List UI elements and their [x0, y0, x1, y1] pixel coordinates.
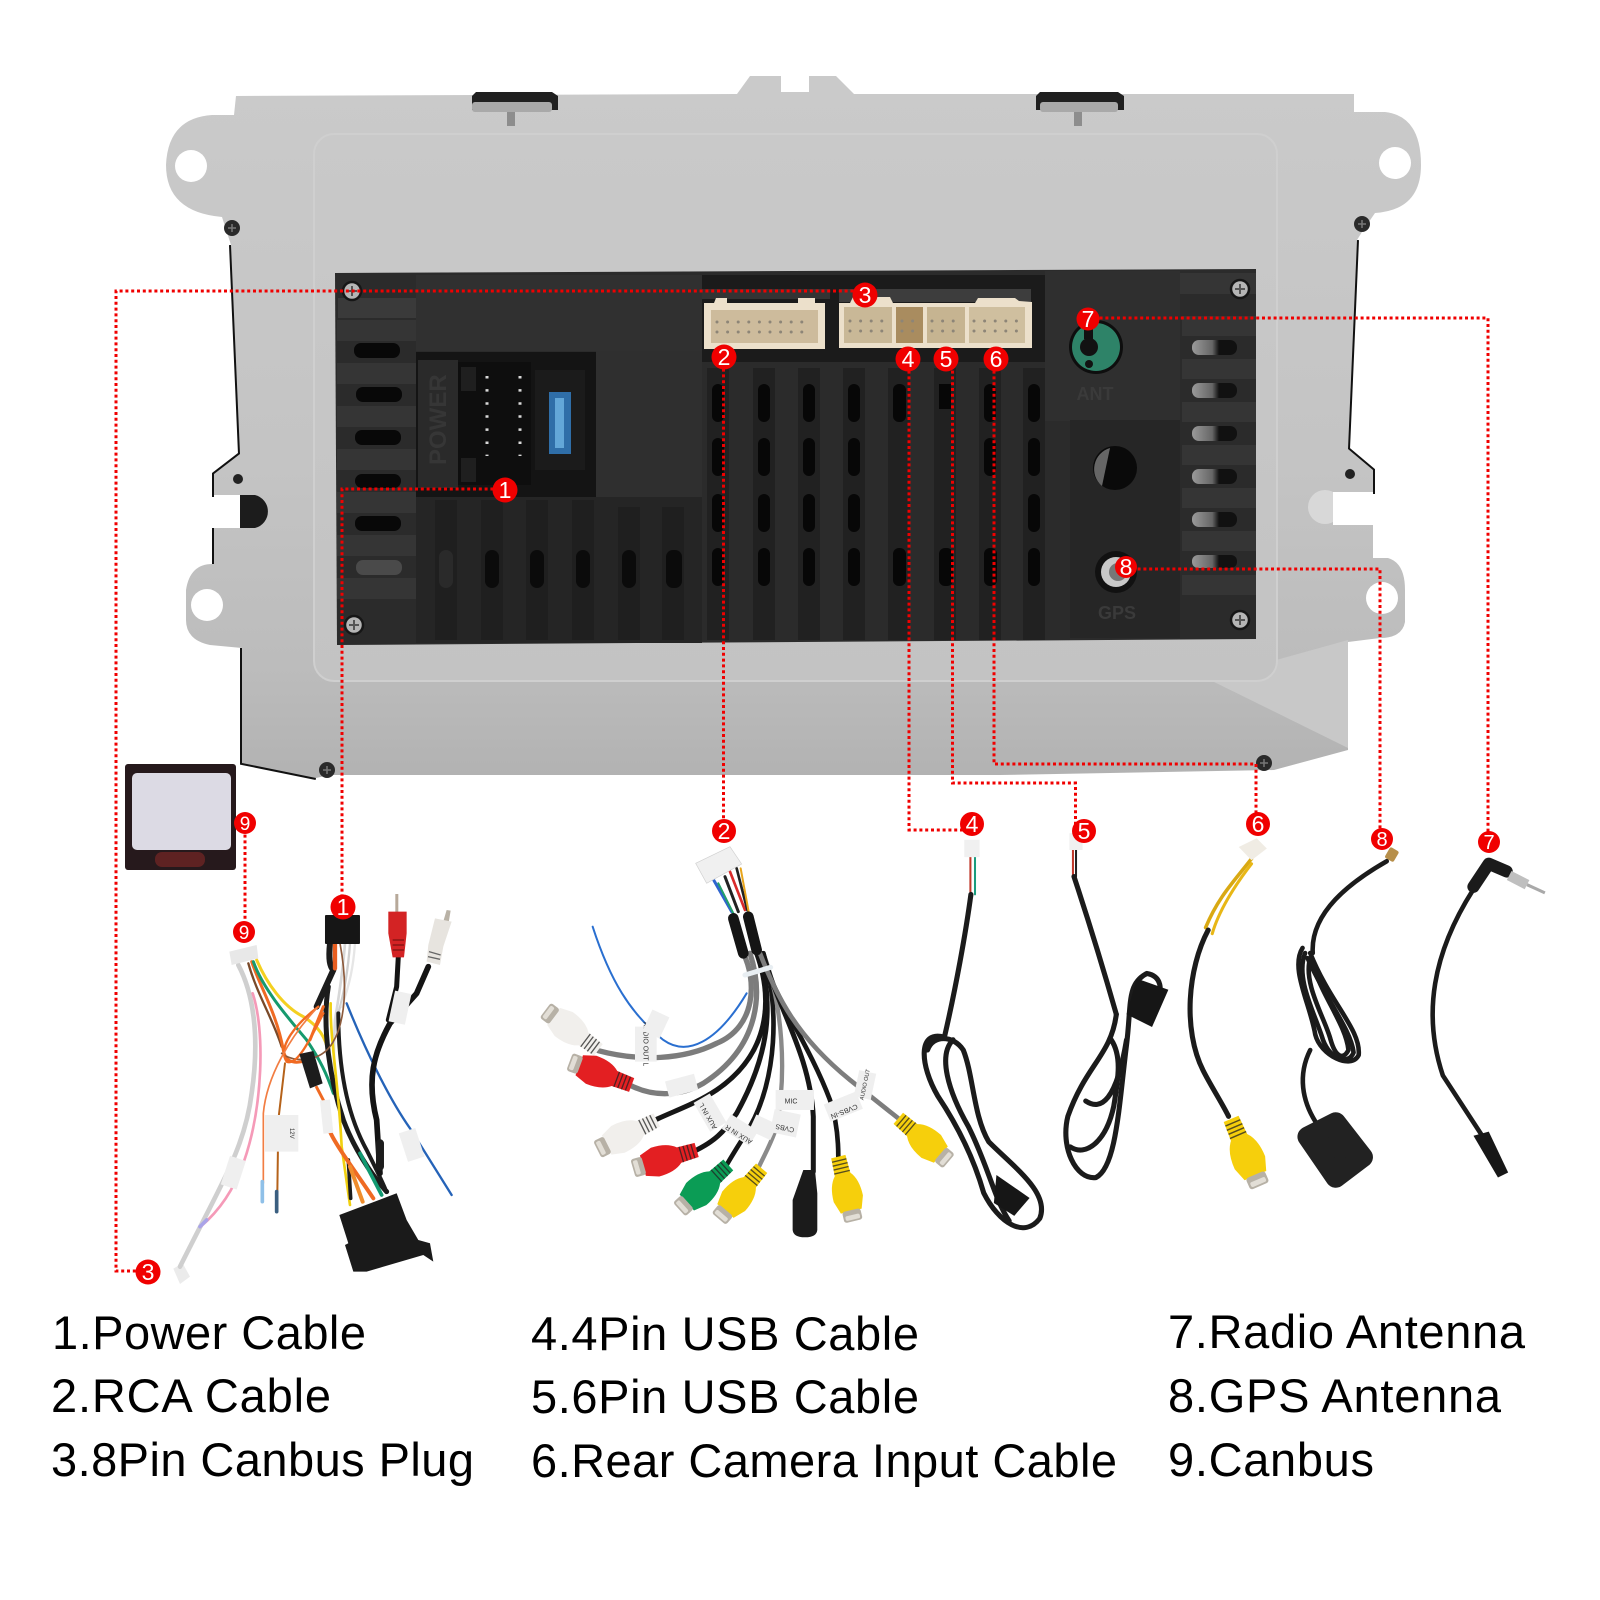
gps antenna [1298, 847, 1399, 1178]
cable tags: 12V [288, 1128, 294, 1139]
numbered badges: 3 [142, 1259, 154, 1285]
legend column 3: 7.Radio Antenna [1168, 1305, 1526, 1358]
numbered badges: 8 [1376, 829, 1388, 851]
legend column 2 [531, 1307, 1117, 1487]
cable tags: CVBS-IN [829, 1102, 858, 1119]
4pin and 6pin USB, camera, GPS and radio cables [924, 833, 1545, 1228]
numbered badges: 4 [966, 811, 979, 837]
numbered badges: 2 [718, 818, 730, 844]
numbered badges: 8 [1120, 554, 1132, 580]
cable tags [635, 1009, 876, 1146]
6pin usb cable [1066, 833, 1168, 1178]
legend column 1 [51, 1306, 474, 1486]
numbered badges: 6 [990, 346, 1002, 372]
numbered badges: 5 [940, 346, 952, 372]
head unit rear plate: ANT [1076, 384, 1114, 404]
legend column 3: 8.GPS Antenna [1168, 1369, 1502, 1422]
legend column 3 [1168, 1305, 1526, 1486]
RCA cable [536, 847, 958, 1237]
numbered badges [136, 282, 1500, 1285]
cable tags [221, 991, 425, 1189]
head unit rear plate: POWER [425, 374, 452, 465]
numbered badges: 2 [718, 344, 730, 370]
cable tags: AUDIO OUT L [641, 1022, 648, 1066]
legend column 2: 5.6Pin USB Cable [531, 1370, 919, 1423]
cable tags: MIC [785, 1098, 797, 1105]
numbered badges: 6 [1252, 811, 1264, 837]
cable tags: AUDIO OUT [859, 1068, 872, 1101]
legend column 1: 3.8Pin Canbus Plug [51, 1433, 474, 1486]
head unit rear plate: GPS [1098, 603, 1136, 623]
connector 3 to 6 sockets [839, 297, 1032, 348]
numbered badges: 1 [337, 894, 349, 920]
rear camera cable [1190, 838, 1275, 1193]
numbered badges: 9 [239, 923, 249, 944]
connector 2 socket [704, 298, 825, 349]
head unit rear plate [166, 76, 1421, 778]
legend column 3: 9.Canbus [1168, 1433, 1374, 1486]
numbered badges: 7 [1483, 832, 1495, 854]
cable tags: AUX IN R [724, 1123, 754, 1145]
numbered badges: 1 [499, 477, 511, 503]
radio antenna [1433, 864, 1545, 1178]
legend column 1: 2.RCA Cable [51, 1369, 331, 1422]
canbus module [125, 764, 236, 870]
numbered badges: 9 [240, 814, 250, 835]
legend column 2: 6.Rear Camera Input Cable [531, 1434, 1117, 1487]
power cable harness [173, 894, 452, 1284]
legend column 1: 1.Power Cable [52, 1306, 366, 1359]
rca plugs [536, 998, 958, 1229]
4pin usb cable [924, 840, 1042, 1228]
cable tags: CVBS [775, 1122, 795, 1133]
numbered badges: 7 [1082, 306, 1094, 332]
numbered badges: 5 [1078, 818, 1090, 844]
cable tags: AUX IN L [698, 1101, 719, 1130]
dotted callout lines [116, 291, 1488, 1271]
numbered badges: 3 [859, 282, 871, 308]
numbered badges: 4 [902, 346, 915, 372]
legend column 2: 4.4Pin USB Cable [531, 1307, 919, 1360]
